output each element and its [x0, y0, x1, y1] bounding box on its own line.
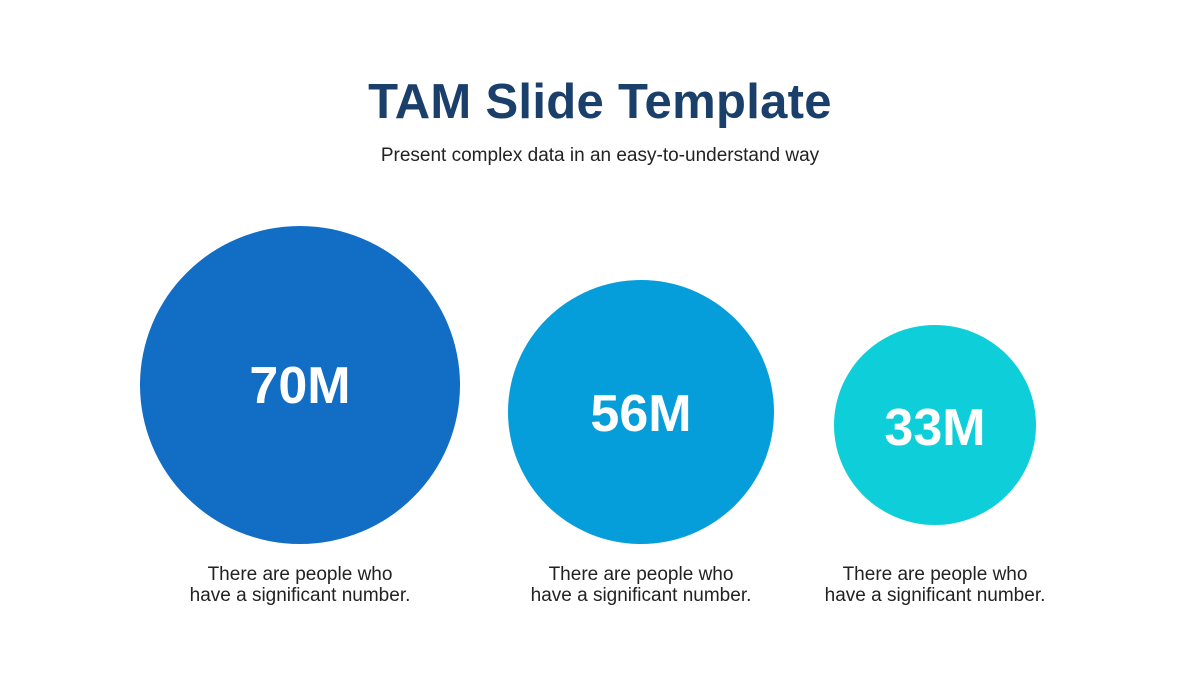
caption 3: There are people who	[843, 564, 1027, 585]
circle: 33M	[834, 325, 1036, 525]
caption 2: There are people who	[549, 564, 733, 585]
circle: 56M: 56M	[590, 385, 692, 443]
caption 3: have a significant number.	[825, 585, 1045, 606]
caption 3	[825, 564, 1045, 606]
caption 1: have a significant number.	[190, 585, 410, 606]
caption 2	[531, 564, 751, 606]
title: TAM Slide Template	[368, 75, 832, 129]
circle: 70M	[140, 226, 460, 544]
circle: 56M	[508, 280, 774, 544]
caption 1: There are people who	[208, 564, 392, 585]
subtitle: Present complex data in an easy-to-understand way	[381, 145, 819, 166]
circle: 70M: 70M	[249, 357, 351, 415]
caption 2: have a significant number.	[531, 585, 751, 606]
caption 1	[190, 564, 410, 606]
circle: 33M: 33M	[884, 399, 986, 457]
